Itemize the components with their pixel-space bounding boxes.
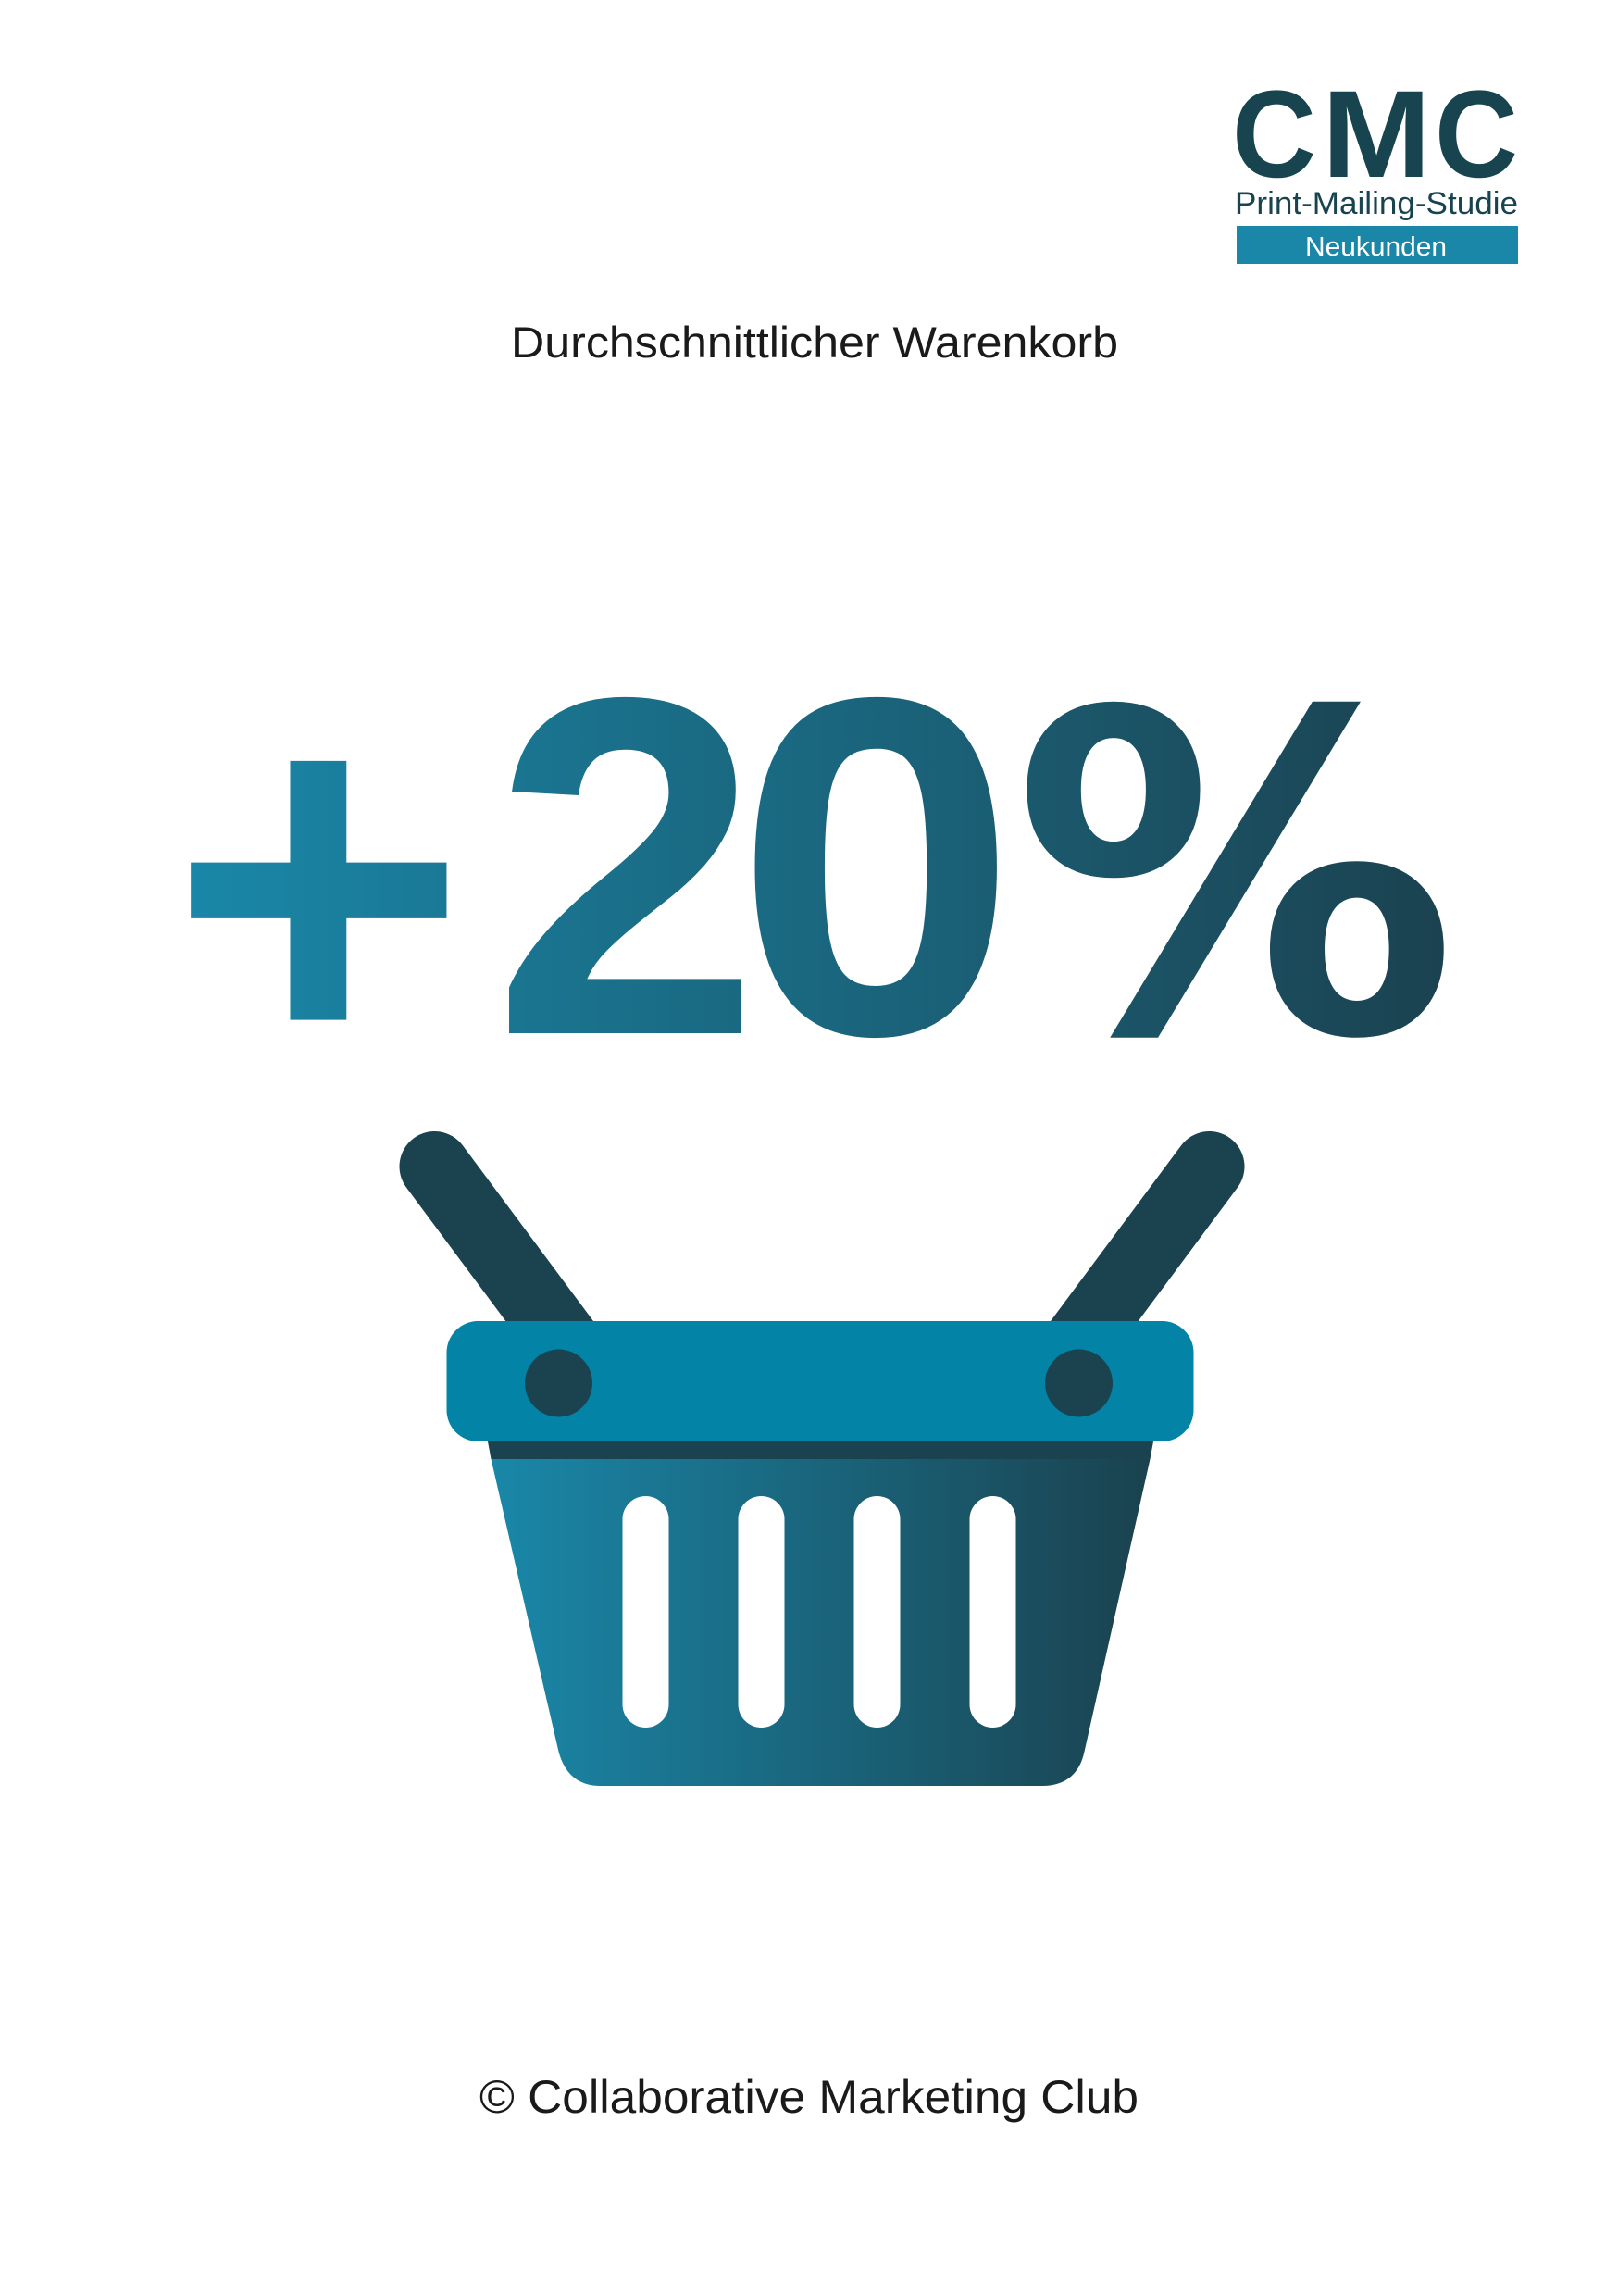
big statistic: +20%: 0 xyxy=(735,599,1017,1136)
basket left handle xyxy=(435,1167,566,1343)
logo wordmark CMC xyxy=(1232,66,1518,204)
logo badge label: Neukunden xyxy=(1305,232,1447,262)
big statistic: +20%: % xyxy=(1013,619,1458,1137)
logo wordmark CMC: C xyxy=(1435,66,1518,204)
basket right handle xyxy=(1077,1167,1209,1343)
heading: Durchschnittlicher Warenkorb xyxy=(511,318,1118,367)
logo subtitle: Print-Mailing-Studie xyxy=(1235,186,1518,221)
basket dark band xyxy=(487,1434,1155,1459)
big statistic: +20%: 2 xyxy=(492,598,760,1136)
icon: shopping basket xyxy=(435,1167,1209,1786)
logo wordmark CMC: C xyxy=(1232,66,1316,204)
basket slots xyxy=(622,1496,1016,1728)
basket rim xyxy=(446,1321,1194,1441)
basket right rivet xyxy=(1045,1350,1113,1416)
big statistic: +20% xyxy=(169,598,1458,1168)
logo badge xyxy=(1237,226,1518,264)
logo: CMC Print-Mailing-Studie Neukunden xyxy=(1232,66,1518,264)
copyright footer: © Collaborative Marketing Club xyxy=(479,2071,1139,2123)
big statistic: +20%: + xyxy=(169,598,467,1168)
basket left rivet xyxy=(525,1350,592,1416)
logo wordmark CMC: M xyxy=(1322,66,1431,204)
basket body xyxy=(491,1459,1150,1786)
